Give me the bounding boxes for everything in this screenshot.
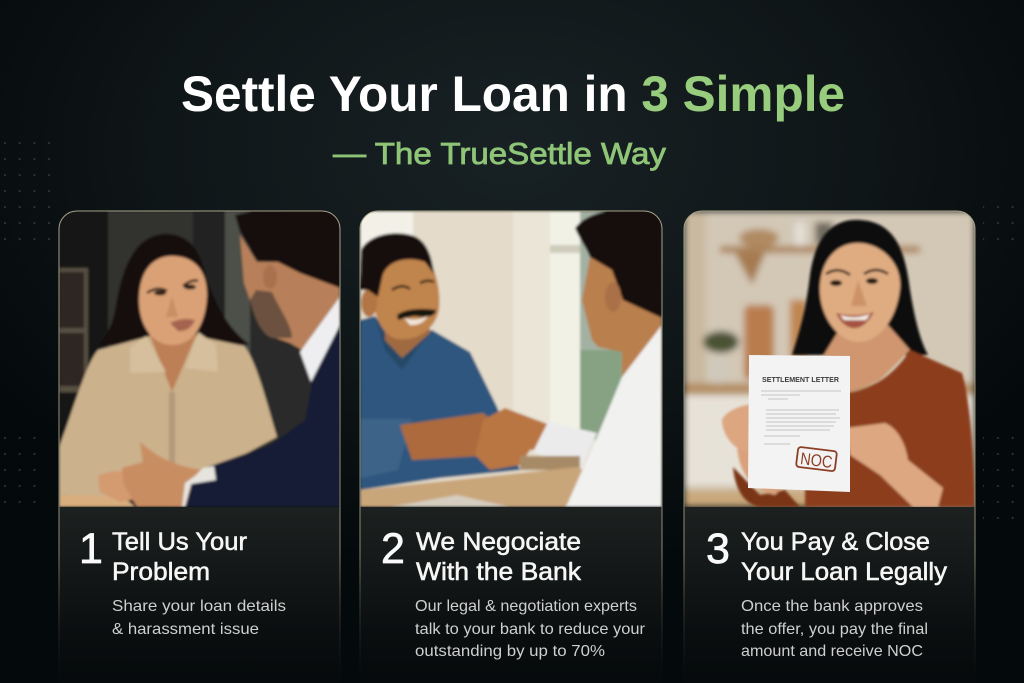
title <box>181 66 845 171</box>
letter body lines <box>761 391 841 444</box>
step number 1: 1 <box>79 525 103 573</box>
text panel background <box>59 507 340 683</box>
step 3 description <box>741 598 928 660</box>
step 2 heading: We Negociate <box>416 528 581 556</box>
step 2 heading: With the Bank <box>416 558 582 586</box>
step 1 description: & harassment issue <box>112 621 259 638</box>
title: Settle Your Loan in 3 Simple <box>181 66 845 122</box>
subtitle: — The TrueSettle Way <box>333 136 667 171</box>
card border <box>59 211 340 683</box>
step 2 heading <box>416 528 582 586</box>
text panel background <box>684 507 975 683</box>
NOC stamp: NOC <box>799 449 833 472</box>
step 1 heading: Problem <box>112 558 210 586</box>
panel: step 1 <box>59 209 340 683</box>
panel: step 2 <box>360 209 662 683</box>
step 3 heading: Your Loan Legally <box>741 558 948 586</box>
step number 2: 2 <box>381 525 405 573</box>
step 3 description: the offer, you pay the final <box>741 621 928 638</box>
step 1 description: Share your loan details <box>112 598 286 615</box>
photo: consultant shaking hands with client <box>360 209 662 507</box>
dot pattern: right <box>983 200 1024 531</box>
step 1 heading: Tell Us Your <box>112 528 247 556</box>
photo: smiling woman holding settlement letter <box>684 211 975 507</box>
step 2 description: outstanding by up to 70% <box>415 643 605 660</box>
step 1 heading <box>112 528 247 586</box>
letter heading: SETTLEMENT LETTER <box>762 375 839 384</box>
step 2 description: Our legal & negotiation experts <box>415 598 637 615</box>
step 3 heading <box>741 528 948 586</box>
text panel background <box>360 507 662 683</box>
step 3 description: Once the bank approves <box>741 598 923 615</box>
panel: step 3 <box>684 211 975 683</box>
step number 3: 3 <box>706 525 730 573</box>
dot pattern: left <box>0 140 56 515</box>
step 2 description <box>415 598 646 660</box>
step 1 description <box>112 598 286 638</box>
card border <box>684 211 975 683</box>
step 2 description: talk to your bank to reduce your <box>415 621 646 638</box>
card border <box>360 211 662 683</box>
settlement letter document <box>748 355 850 492</box>
step 3 description: amount and receive NOC <box>741 643 923 660</box>
step 3 heading: You Pay & Close <box>741 528 930 556</box>
photo: woman explaining her problem to a consultant <box>59 209 340 507</box>
